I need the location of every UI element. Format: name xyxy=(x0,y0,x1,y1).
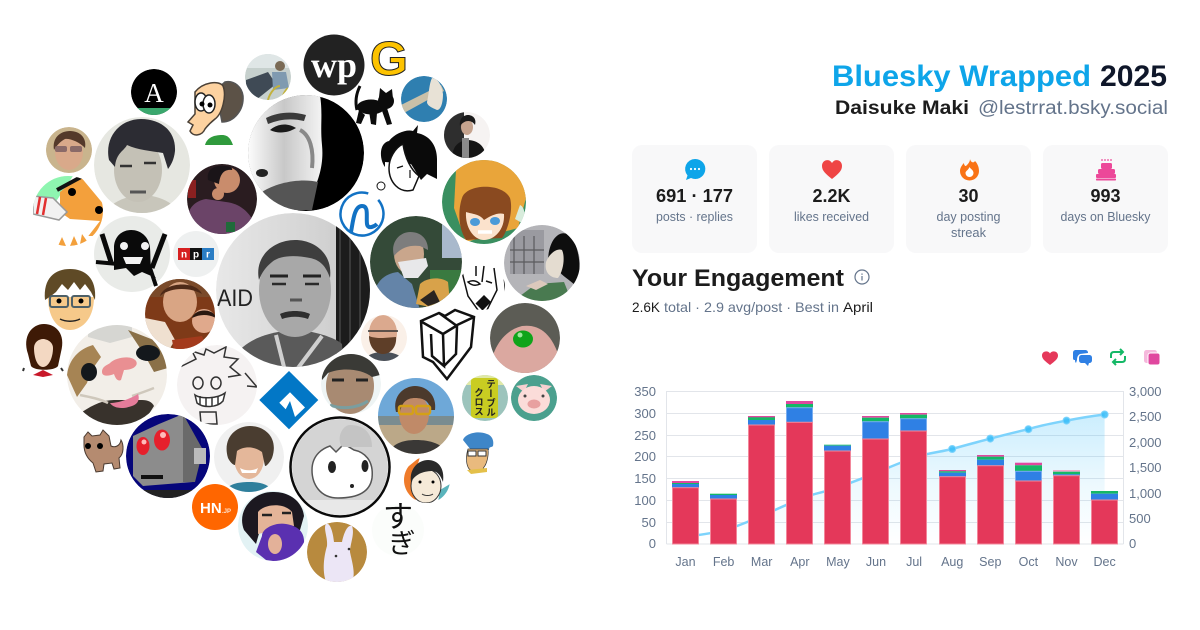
avatar: line art girl with dark hair xyxy=(377,125,437,191)
month labels xyxy=(675,555,1116,569)
avatar: yellow G logo: G xyxy=(370,33,408,86)
avatar: man with glasses xyxy=(46,127,92,175)
avatar: man with tube in mouth xyxy=(321,353,381,414)
bar: Aug xyxy=(939,470,966,544)
icon: flame xyxy=(960,159,979,180)
month labels: May xyxy=(826,555,850,569)
bar: Mar xyxy=(748,416,775,544)
avatar: blue diamond G logo xyxy=(259,371,318,429)
avatar: main black and white portrait: AID xyxy=(217,285,253,312)
avatar: black cat silhouette xyxy=(356,86,394,125)
engagement summary: total · 2.9 avg/post · Best in xyxy=(664,299,839,315)
avatar: manga girl with black hair xyxy=(504,225,580,304)
avatar: robot building xyxy=(125,414,215,500)
stacked bars xyxy=(672,401,1118,544)
engagement summary: 2.6K xyxy=(632,299,661,315)
avatar: pink pig on teal xyxy=(511,375,557,421)
avatar: anime girl in orange cat hood xyxy=(442,160,526,244)
avatar: green bead on finger xyxy=(490,303,560,375)
avatar: Table Cross yellow sign xyxy=(462,375,508,421)
title: Bluesky Wrapped 2025: Bluesky Wrapped xyxy=(832,60,1091,93)
avatar: Table Cross yellow sign: クロス xyxy=(472,388,486,416)
avatar: blue haired man with glasses xyxy=(463,432,493,474)
avatar: person with purple pillow xyxy=(238,491,308,562)
month labels: Feb xyxy=(713,555,734,569)
avatar: orange character xyxy=(33,176,105,246)
avatar: dark photo purple hoodie xyxy=(187,164,258,238)
avatar: cartoon man xyxy=(188,82,243,145)
stat card: posts and replies xyxy=(632,145,757,253)
engagement summary: April xyxy=(843,299,873,315)
avatar: NPR logo: n xyxy=(181,250,187,260)
bar: May xyxy=(824,445,851,544)
avatar: NPR logo: r xyxy=(206,250,210,260)
avatar: masked man with glasses xyxy=(370,216,462,308)
stat card: days on Bluesky xyxy=(1043,145,1168,253)
avatar: man in dark jacket xyxy=(444,112,490,160)
avatar: line sketch of grinning character xyxy=(177,345,257,425)
avatar: plush bunny xyxy=(307,522,367,582)
left axis labels: 50 xyxy=(642,515,656,530)
stat card: likes received: 2.2K xyxy=(812,186,850,206)
icon: legend replies xyxy=(1073,350,1092,366)
avatar: black ninja ghost xyxy=(94,216,170,292)
left axis labels: 150 xyxy=(634,471,656,486)
month labels: Jul xyxy=(906,555,922,569)
user name and handle xyxy=(835,98,1168,119)
bar: Jan xyxy=(672,481,699,544)
avatar: cartoon man with teal and orange background xyxy=(404,457,450,503)
month labels: Mar xyxy=(751,555,772,569)
stat card: days on Bluesky: days on Bluesky xyxy=(1060,210,1151,224)
icon: legend heart xyxy=(1042,351,1058,365)
bar: Jul xyxy=(900,413,927,544)
left axis labels: 350 xyxy=(634,384,656,399)
avatar: blue photo with bird xyxy=(401,76,447,122)
bar: Oct xyxy=(1015,463,1042,544)
month labels: Dec xyxy=(1093,555,1116,569)
left axis labels xyxy=(634,384,656,551)
bar: Jun xyxy=(862,416,889,544)
avatar: NPR logo: p xyxy=(193,250,199,260)
left axis labels: 300 xyxy=(634,406,656,421)
stat card: likes received: likes received xyxy=(794,210,869,224)
avatar: Atlantic A logo xyxy=(131,69,177,116)
avatar: Atlantic A logo: A xyxy=(144,78,164,108)
stat card: posting streak: streak xyxy=(951,226,987,240)
right axis labels: 3,000 xyxy=(1129,384,1162,399)
user name and handle: @lestrrat.bsky.social xyxy=(978,98,1168,119)
stat card: likes received xyxy=(769,145,894,253)
bar: Sep xyxy=(977,455,1004,544)
avatar: man with yellow glasses at the beach xyxy=(378,378,454,455)
month labels: Jan xyxy=(675,555,696,569)
month labels: Sep xyxy=(979,555,1001,569)
stat card: posting streak: day posting xyxy=(936,210,1001,224)
stat card: posting streak: 30 xyxy=(958,186,978,206)
avatar: astronaut manga ring xyxy=(290,418,390,518)
chart legend icons xyxy=(1042,349,1160,366)
bar: Nov xyxy=(1053,470,1080,544)
avatar: HN.jp logo xyxy=(192,484,238,530)
right axis labels: 0 xyxy=(1129,536,1136,551)
avatar: hiragana sugi handwriting: ぎ xyxy=(388,522,416,561)
right axis labels: 500 xyxy=(1129,511,1151,526)
avatar: small photo with person xyxy=(245,54,291,100)
month labels: Nov xyxy=(1055,555,1078,569)
left axis labels: 0 xyxy=(649,536,656,551)
avatar: hiragana sugi handwriting xyxy=(372,492,424,561)
month labels: Apr xyxy=(790,555,810,569)
stat card: posts and replies: posts · replies xyxy=(656,210,733,224)
avatar: black and white portrait xyxy=(94,117,190,218)
bar: Dec xyxy=(1091,491,1118,544)
combo chart: monthly engagement xyxy=(634,384,1162,569)
right axis labels: 1,500 xyxy=(1129,460,1162,475)
avatar: Mii character xyxy=(45,269,95,330)
avatar: Washington Post logo xyxy=(304,34,364,96)
bar: Feb xyxy=(710,494,737,544)
stat card: posting streak xyxy=(906,145,1031,253)
avatar: HN.jp logo: HN xyxy=(200,500,222,517)
avatar: ink sketch of face xyxy=(462,266,505,310)
right axis labels: 2,000 xyxy=(1129,435,1162,450)
icon: cake xyxy=(1096,159,1116,180)
chart grid xyxy=(666,391,1124,544)
avatar: main black and white portrait xyxy=(216,213,370,372)
avatar: father and child photo xyxy=(145,279,216,350)
heading: Your Engagement: Your Engagement xyxy=(632,265,844,292)
user name and handle: Daisuke Maki xyxy=(835,98,969,119)
left axis labels: 250 xyxy=(634,428,656,443)
avatar: hiragana sugi handwriting: す xyxy=(383,492,413,536)
avatar: cat with tongue xyxy=(67,325,168,428)
cumulative area and line xyxy=(686,411,1108,544)
left axis labels: 100 xyxy=(634,493,656,508)
avatar: bald bearded man with glasses xyxy=(361,315,407,361)
icon: info xyxy=(855,270,869,284)
icon: legend quotes xyxy=(1144,350,1160,365)
stat card: days on Bluesky: 993 xyxy=(1090,186,1120,206)
avatar: NPR logo xyxy=(173,231,219,277)
title: Bluesky Wrapped 2025: 2025 xyxy=(1100,60,1167,93)
right axis labels xyxy=(1129,384,1162,551)
month labels: Jun xyxy=(866,555,886,569)
avatar: Table Cross yellow sign: テーブル xyxy=(484,379,498,417)
avatar: blue n logo xyxy=(334,186,390,242)
avatar bubble cluster xyxy=(23,33,580,582)
avatar: curly haired man xyxy=(214,422,284,492)
stat card: posts and replies: 691 · 177 xyxy=(656,186,733,206)
avatar: anime portrait with bow tie xyxy=(23,324,63,377)
month labels: Aug xyxy=(941,555,963,569)
avatar: isometric cube logo xyxy=(421,310,474,379)
right axis labels: 1,000 xyxy=(1129,486,1162,501)
right axis labels: 2,500 xyxy=(1129,409,1162,424)
month labels: Oct xyxy=(1019,555,1039,569)
avatar: black and white half face xyxy=(246,95,364,211)
avatar: Washington Post logo: wp xyxy=(311,45,357,85)
icon: legend reposts xyxy=(1111,349,1125,365)
avatar: small brown cat xyxy=(84,430,123,472)
icon: heart xyxy=(822,160,842,179)
left axis labels: 200 xyxy=(634,449,656,464)
avatar: HN.jp logo: .JP xyxy=(222,509,231,515)
icon: chat bubble xyxy=(685,159,705,180)
bar: Apr xyxy=(786,401,813,544)
